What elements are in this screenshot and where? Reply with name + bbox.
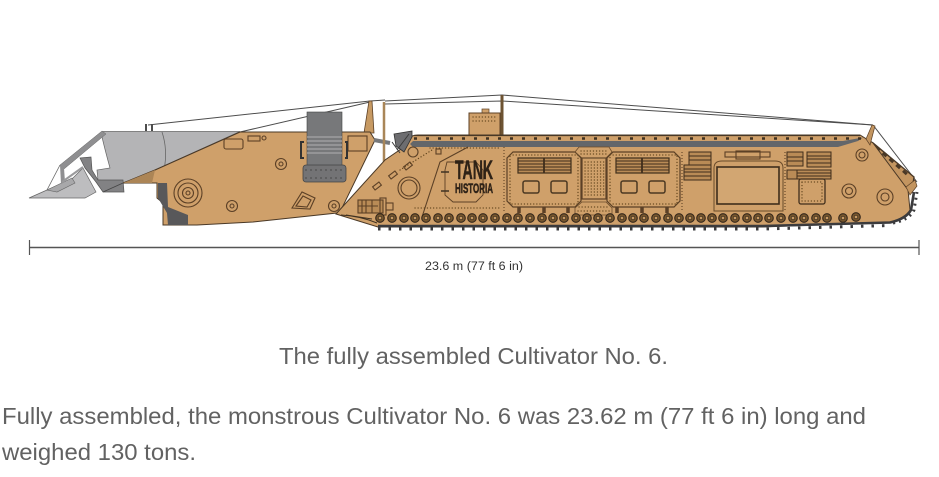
bow fittings — [373, 147, 441, 199]
logo: Tank Historia — [455, 155, 493, 196]
connector pipe — [374, 140, 390, 143]
front body — [123, 132, 375, 225]
dimension label: 23.6 m (77 ft 6 in) — [425, 261, 523, 273]
rear hubs — [842, 149, 893, 205]
nose track — [860, 139, 914, 192]
body text: weighed 130 tons. — [1, 439, 196, 465]
rear large hatch — [714, 151, 783, 211]
body text: Fully assembled, the monstrous Cultivator No. 6 was 23.62 m (77 ft 6 in) long and — [2, 403, 866, 429]
front hub — [174, 179, 202, 207]
fan housing — [394, 131, 412, 152]
side hatch — [445, 162, 483, 202]
side armour panel right — [607, 152, 680, 213]
logo: Tank Historia: HISTORIA — [455, 181, 493, 196]
dark wedge — [158, 183, 188, 225]
logo: Tank Historia: TANK — [455, 155, 493, 185]
lower track — [378, 192, 917, 229]
centre mesh panels — [575, 147, 612, 215]
central mast — [500, 95, 504, 136]
top box — [469, 109, 500, 135]
rear small hatch — [799, 179, 825, 204]
road wheels — [376, 213, 860, 222]
upper track band — [410, 138, 863, 147]
rear mast — [383, 102, 385, 177]
plough hood — [97, 132, 240, 183]
rear louvres — [684, 152, 831, 180]
engine block — [358, 198, 393, 215]
side armour panel left — [507, 152, 581, 213]
front plough section — [29, 112, 375, 225]
plough frame — [47, 131, 106, 190]
vehicle illustration: Cultivator No. 6 side view — [29, 95, 917, 229]
plough blade — [29, 168, 96, 198]
plough arm — [80, 157, 124, 192]
front mast — [364, 101, 374, 133]
rear hull — [336, 125, 917, 227]
hull seam — [422, 147, 468, 217]
body text — [1, 403, 866, 465]
dimension line — [30, 240, 919, 273]
caption: The fully assembled Cultivator No. 6. — [279, 343, 668, 369]
track bundle — [307, 112, 342, 166]
hull mast fitting — [866, 125, 875, 145]
support cables — [146, 95, 917, 182]
